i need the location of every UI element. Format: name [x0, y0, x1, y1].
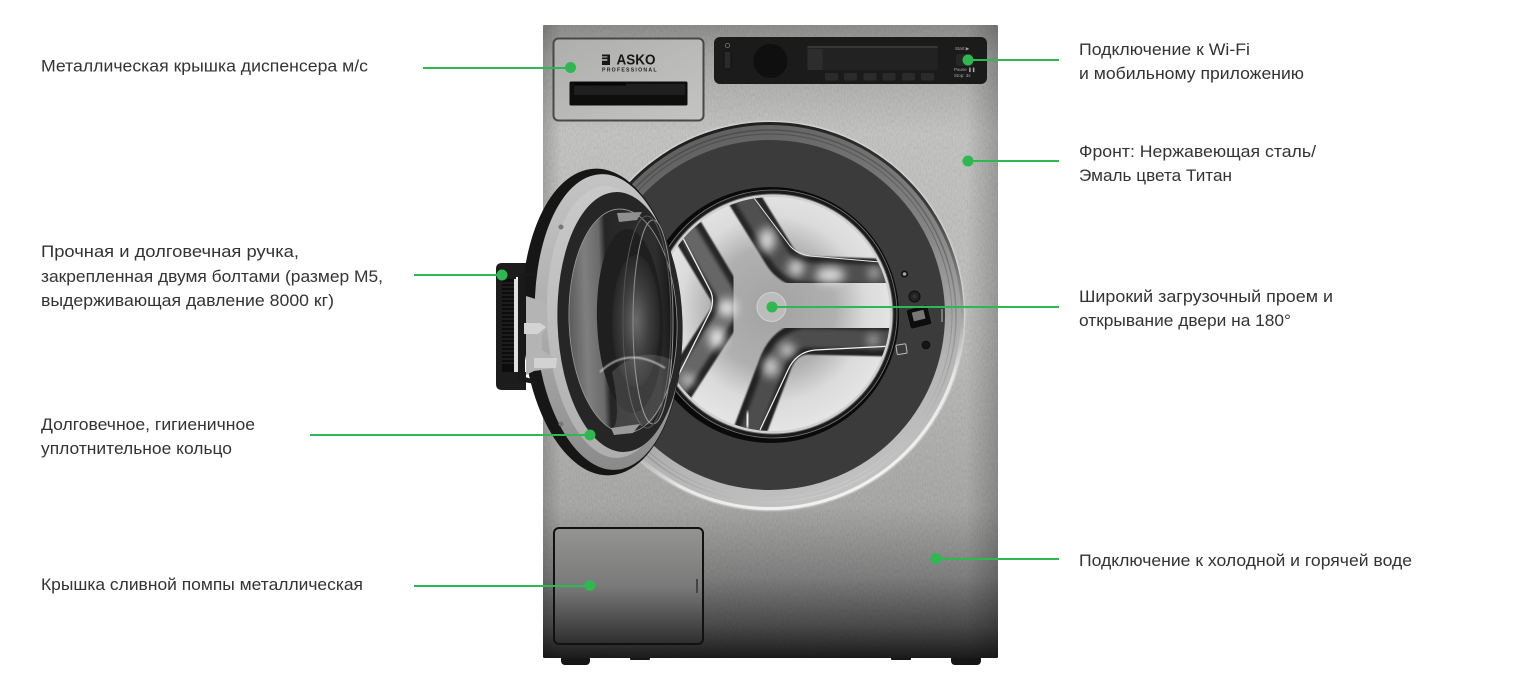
callout: front material — [962, 143, 1316, 185]
power button — [724, 43, 731, 69]
sensors and service port — [896, 270, 942, 355]
start button and labels: Stop: 3s — [954, 73, 971, 78]
door handle — [496, 263, 526, 390]
callout: loading opening — [766, 288, 1333, 330]
open door — [514, 165, 690, 479]
callout: Wi-Fi: и мобильному приложению — [1079, 65, 1304, 83]
program buttons — [825, 73, 934, 80]
highlights — [759, 228, 879, 283]
callout: pump cover: Крышка сливной помпы металлическая — [41, 576, 363, 594]
logo: ASKO Professional: PROFESSIONAL — [602, 68, 657, 74]
door surround dark face — [595, 140, 945, 490]
hinge bar and brackets — [518, 224, 564, 426]
drum lifters — [672, 195, 892, 436]
door gasket — [553, 190, 687, 454]
callout: handle: Прочная и долговечная ручка, — [41, 243, 299, 261]
drum hub — [757, 292, 786, 322]
control panel — [714, 37, 987, 84]
callout: sealing ring: уплотнительное кольцо — [41, 440, 232, 458]
callout: water connection: Подключение к холодной и горячей воде — [1079, 552, 1412, 570]
callout: sealing ring — [41, 416, 596, 458]
door outer frame — [514, 165, 690, 479]
callout: pump cover — [41, 576, 596, 594]
door opening surround — [575, 121, 965, 511]
start button and labels — [954, 46, 976, 78]
drum opening rim — [643, 187, 899, 443]
display — [808, 46, 938, 70]
pump cover — [554, 528, 703, 644]
dispenser slot — [570, 82, 688, 106]
logo: ASKO Professional: ASKO — [616, 52, 656, 68]
callout: sealing ring: Долговечное, гигиеничное — [41, 416, 255, 434]
door glass — [565, 207, 681, 435]
lifter: bottom right — [747, 335, 892, 436]
washing machine — [496, 25, 998, 665]
callout: Wi-Fi: Подключение к Wi-Fi — [1079, 41, 1250, 59]
lifter: left — [672, 218, 736, 398]
steel front body — [543, 25, 998, 658]
drum interior — [672, 197, 890, 431]
callout: front material: Фронт: Нержавеющая сталь/ — [1079, 143, 1316, 161]
callout: dispenser cover: Металлическая крышка диспенсера м/с — [41, 58, 368, 76]
callout: loading opening: открывание двери на 180° — [1079, 312, 1291, 330]
logo: ASKO Professional — [602, 52, 657, 74]
callout: handle — [41, 243, 508, 310]
callout: front material: Эмаль цвета Титан — [1079, 167, 1232, 185]
highlights — [682, 299, 736, 385]
callout: dispenser cover — [41, 58, 576, 76]
callout: loading opening: Широкий загрузочный проем и — [1079, 288, 1333, 306]
start button and labels: Pause ❚❚ — [954, 67, 976, 73]
lifter: top right — [742, 195, 892, 283]
callout: handle: закрепленная двумя болтами (размер М5, — [41, 268, 383, 286]
callout: water connection — [930, 552, 1412, 570]
detergent dispenser cover — [554, 38, 704, 120]
callout: handle: выдерживающая давление 8000 кг) — [41, 292, 334, 310]
highlights — [763, 335, 878, 377]
callout: Wi-Fi — [962, 41, 1304, 83]
machine feet — [561, 655, 981, 665]
program dial — [754, 44, 788, 78]
start button and labels: Start ▶ — [955, 46, 970, 51]
